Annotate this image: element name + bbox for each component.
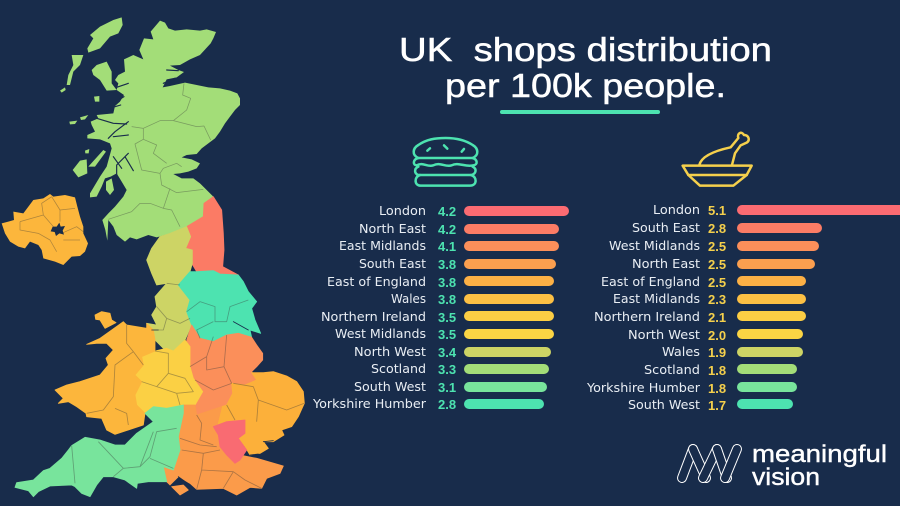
region: East Midlands <box>187 325 263 415</box>
row: East Midlands: East Midlands <box>613 291 700 306</box>
row: South East: 2.8 <box>708 221 726 236</box>
row: East Midlands: East Midlands <box>339 238 426 253</box>
row: North West: North West <box>628 327 700 342</box>
row: Yorkshire Humber: Yorkshire Humber <box>312 396 427 411</box>
region: North East <box>186 197 238 275</box>
row: Northern Ireland: 3.5 <box>438 310 456 325</box>
row: West Midlands: West Midlands <box>609 238 700 253</box>
icon: roast chicken on a plate <box>683 133 752 186</box>
row: Scotland: Scotland <box>371 361 426 376</box>
row: West Midlands: 3.5 <box>438 327 456 342</box>
row: East Midlands <box>613 291 806 307</box>
row: Northern Ireland: Northern Ireland <box>594 309 700 324</box>
row: Wales <box>391 291 554 307</box>
row: Scotland: Scotland <box>644 362 700 377</box>
row: London <box>379 203 569 219</box>
row: Wales: Wales <box>391 291 426 306</box>
row: South East: South East <box>359 256 426 271</box>
logo mark <box>682 449 737 478</box>
row: London: London <box>379 203 426 218</box>
row: West Midlands <box>335 326 554 342</box>
row: Northern Ireland: 2.1 <box>708 310 726 325</box>
row: North East: 2.5 <box>708 257 726 272</box>
row: East Midlands: 2.3 <box>708 292 726 307</box>
title underline <box>500 110 660 114</box>
row: Yorkshire Humber: Yorkshire Humber <box>586 380 701 395</box>
row: Yorkshire Humber: 2.8 <box>438 397 456 412</box>
map: UK regions <box>2 17 304 497</box>
row: North West <box>628 327 803 343</box>
row: North West: North West <box>354 344 426 359</box>
row: North East: 4.2 <box>438 222 456 237</box>
row: North West <box>354 344 551 360</box>
row: North West: 2.0 <box>708 328 726 343</box>
row: East Midlands <box>339 238 559 254</box>
row: East of England: 2.5 <box>708 275 726 290</box>
row: North East: North East <box>632 256 700 271</box>
region: London <box>213 420 247 463</box>
row: Yorkshire Humber: 1.8 <box>708 381 726 396</box>
row: Yorkshire Humber <box>586 380 797 396</box>
row: South East <box>632 220 822 236</box>
logo: meaningful vision: vision <box>752 464 820 491</box>
row: Northern Ireland <box>594 309 806 325</box>
row: South West: 3.1 <box>438 380 456 395</box>
row: London: 4.2 <box>438 204 456 219</box>
row: West Midlands: 2.5 <box>708 239 726 254</box>
row: East of England <box>327 274 554 290</box>
region: Scotland <box>60 17 240 242</box>
row: East of England: East of England <box>601 274 700 289</box>
title: UK shops distribution <box>399 31 772 68</box>
row: South West <box>628 397 793 413</box>
row: East Midlands: 4.1 <box>438 239 456 254</box>
region: East of England <box>217 372 304 455</box>
row: Scotland: 1.8 <box>708 363 726 378</box>
row: South West <box>354 379 547 395</box>
title <box>399 31 772 104</box>
row: Scotland <box>371 361 549 377</box>
row: South West: South West <box>628 397 700 412</box>
region: North West <box>147 227 192 351</box>
region: Northern Ireland <box>2 194 88 265</box>
row: South East: South East <box>632 220 700 235</box>
row: East of England <box>601 274 806 290</box>
row: South West: 1.7 <box>708 398 726 413</box>
row: Northern Ireland <box>321 309 554 325</box>
bar chart: chicken shops <box>586 202 900 413</box>
row: North East <box>632 256 815 272</box>
region: South East <box>163 405 283 495</box>
logo wordmark: meaningful <box>752 441 887 468</box>
row: North East <box>359 221 559 237</box>
row: Yorkshire Humber <box>312 396 544 412</box>
row: West Midlands: West Midlands <box>335 326 426 341</box>
row: Wales: 1.9 <box>708 345 726 360</box>
row: Wales: 3.8 <box>438 292 456 307</box>
row: London <box>653 202 900 218</box>
row: Northern Ireland: Northern Ireland <box>321 309 426 324</box>
logo: meaningful vision <box>682 441 887 491</box>
region: Yorkshire and Humber <box>178 271 261 342</box>
row: London: London <box>653 202 700 217</box>
region: West Midlands <box>135 340 203 413</box>
row: North East: North East <box>359 221 426 236</box>
title: per 100k people. <box>445 67 726 104</box>
row: London: 5.1 <box>708 203 726 218</box>
row: East of England: 3.8 <box>438 275 456 290</box>
row: East of England: East of England <box>327 274 426 289</box>
row: North West: 3.4 <box>438 345 457 360</box>
row: South West: South West <box>354 379 426 394</box>
region: Wales <box>55 322 155 434</box>
row: Wales <box>662 344 803 360</box>
row: Scotland: 3.3 <box>438 362 456 377</box>
row: South East: 3.8 <box>438 257 456 272</box>
row: Wales: Wales <box>662 344 700 359</box>
row: West Midlands <box>609 238 819 254</box>
bar chart: burger shops <box>312 203 569 412</box>
region: South West <box>15 405 183 497</box>
row: Scotland <box>644 362 797 378</box>
icon: burger <box>414 138 477 186</box>
row: South East <box>359 256 556 272</box>
